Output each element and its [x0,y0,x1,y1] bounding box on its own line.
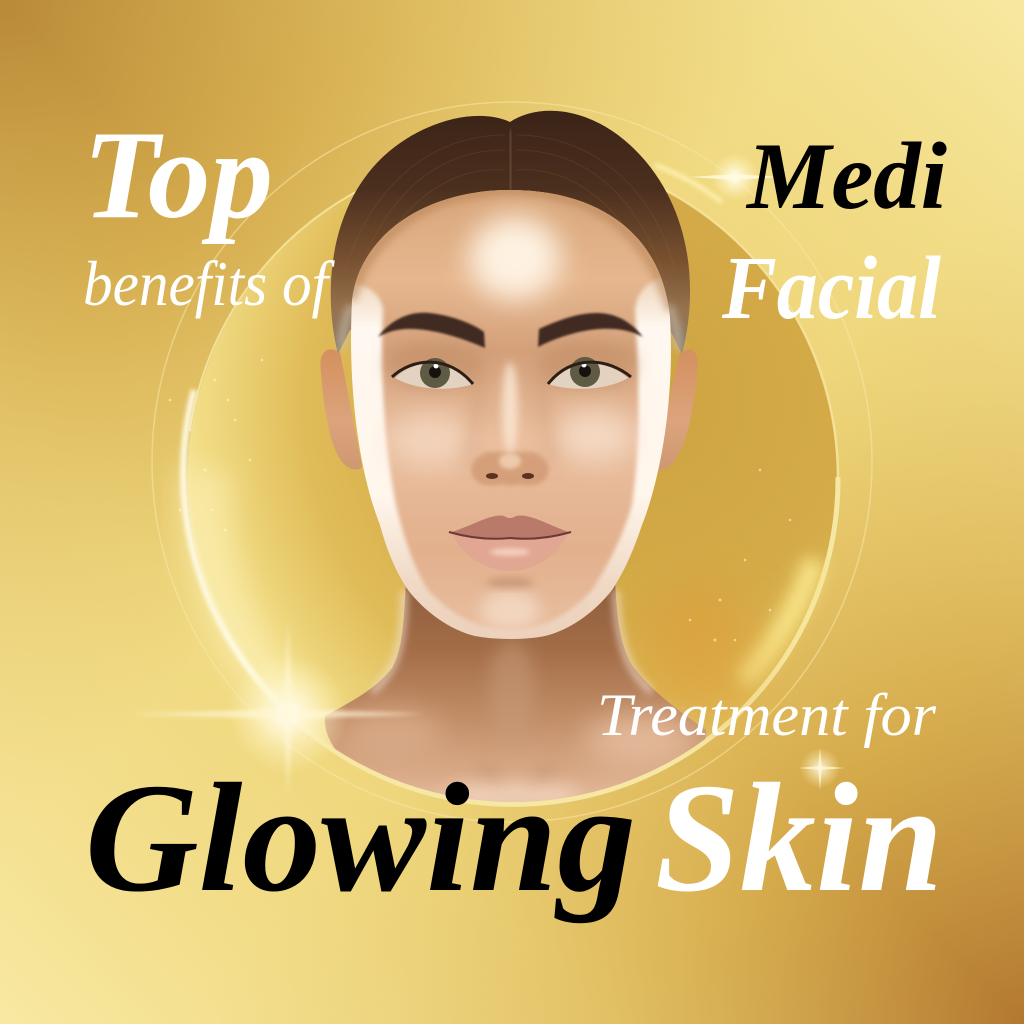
left eyebrow [378,313,485,348]
heading: Glowing: Glowing [85,751,636,924]
starburst lower left [130,620,425,795]
lips [449,516,571,571]
neck edge light [372,590,652,692]
forehead highlight [469,216,561,300]
hair grey temple [342,305,678,350]
heading: Facial: Facial [721,239,941,338]
left eye [392,358,473,389]
portrait [320,111,706,820]
hair strands [345,135,675,300]
collarbone [486,772,548,782]
left glow arc [204,470,290,710]
neck centre sheen [488,639,536,720]
right eyebrow [538,313,643,347]
starburst lower right [798,748,845,790]
cheek highlights [390,412,470,468]
ears [320,349,698,470]
shoulder light [342,709,442,761]
heading: benefits of: benefits of [83,248,336,319]
chin highlight [480,590,540,630]
face [351,190,671,639]
eye socket shadows [385,341,485,389]
heading: Skin: Skin [655,751,943,924]
hairline blend [350,190,672,310]
heading: Medi: Medi [745,123,947,229]
right glow band [742,560,815,680]
nose side shadow [463,414,556,458]
nose [471,362,549,486]
hair [331,111,690,354]
upper right glow streak [655,165,722,202]
shadow below lip [486,578,534,588]
heading: Top: Top [83,106,273,245]
ring lower rim [225,477,838,804]
hair parting [510,130,511,192]
inner skin [356,190,661,630]
heading: Treatment for: Treatment for [597,682,937,748]
glowing gold circle [152,102,872,822]
starburst upper right [690,153,780,201]
gold sparkle dust [169,359,791,642]
right eye [548,357,631,389]
neck and shoulders [325,580,706,820]
ring upper rim [190,172,400,430]
